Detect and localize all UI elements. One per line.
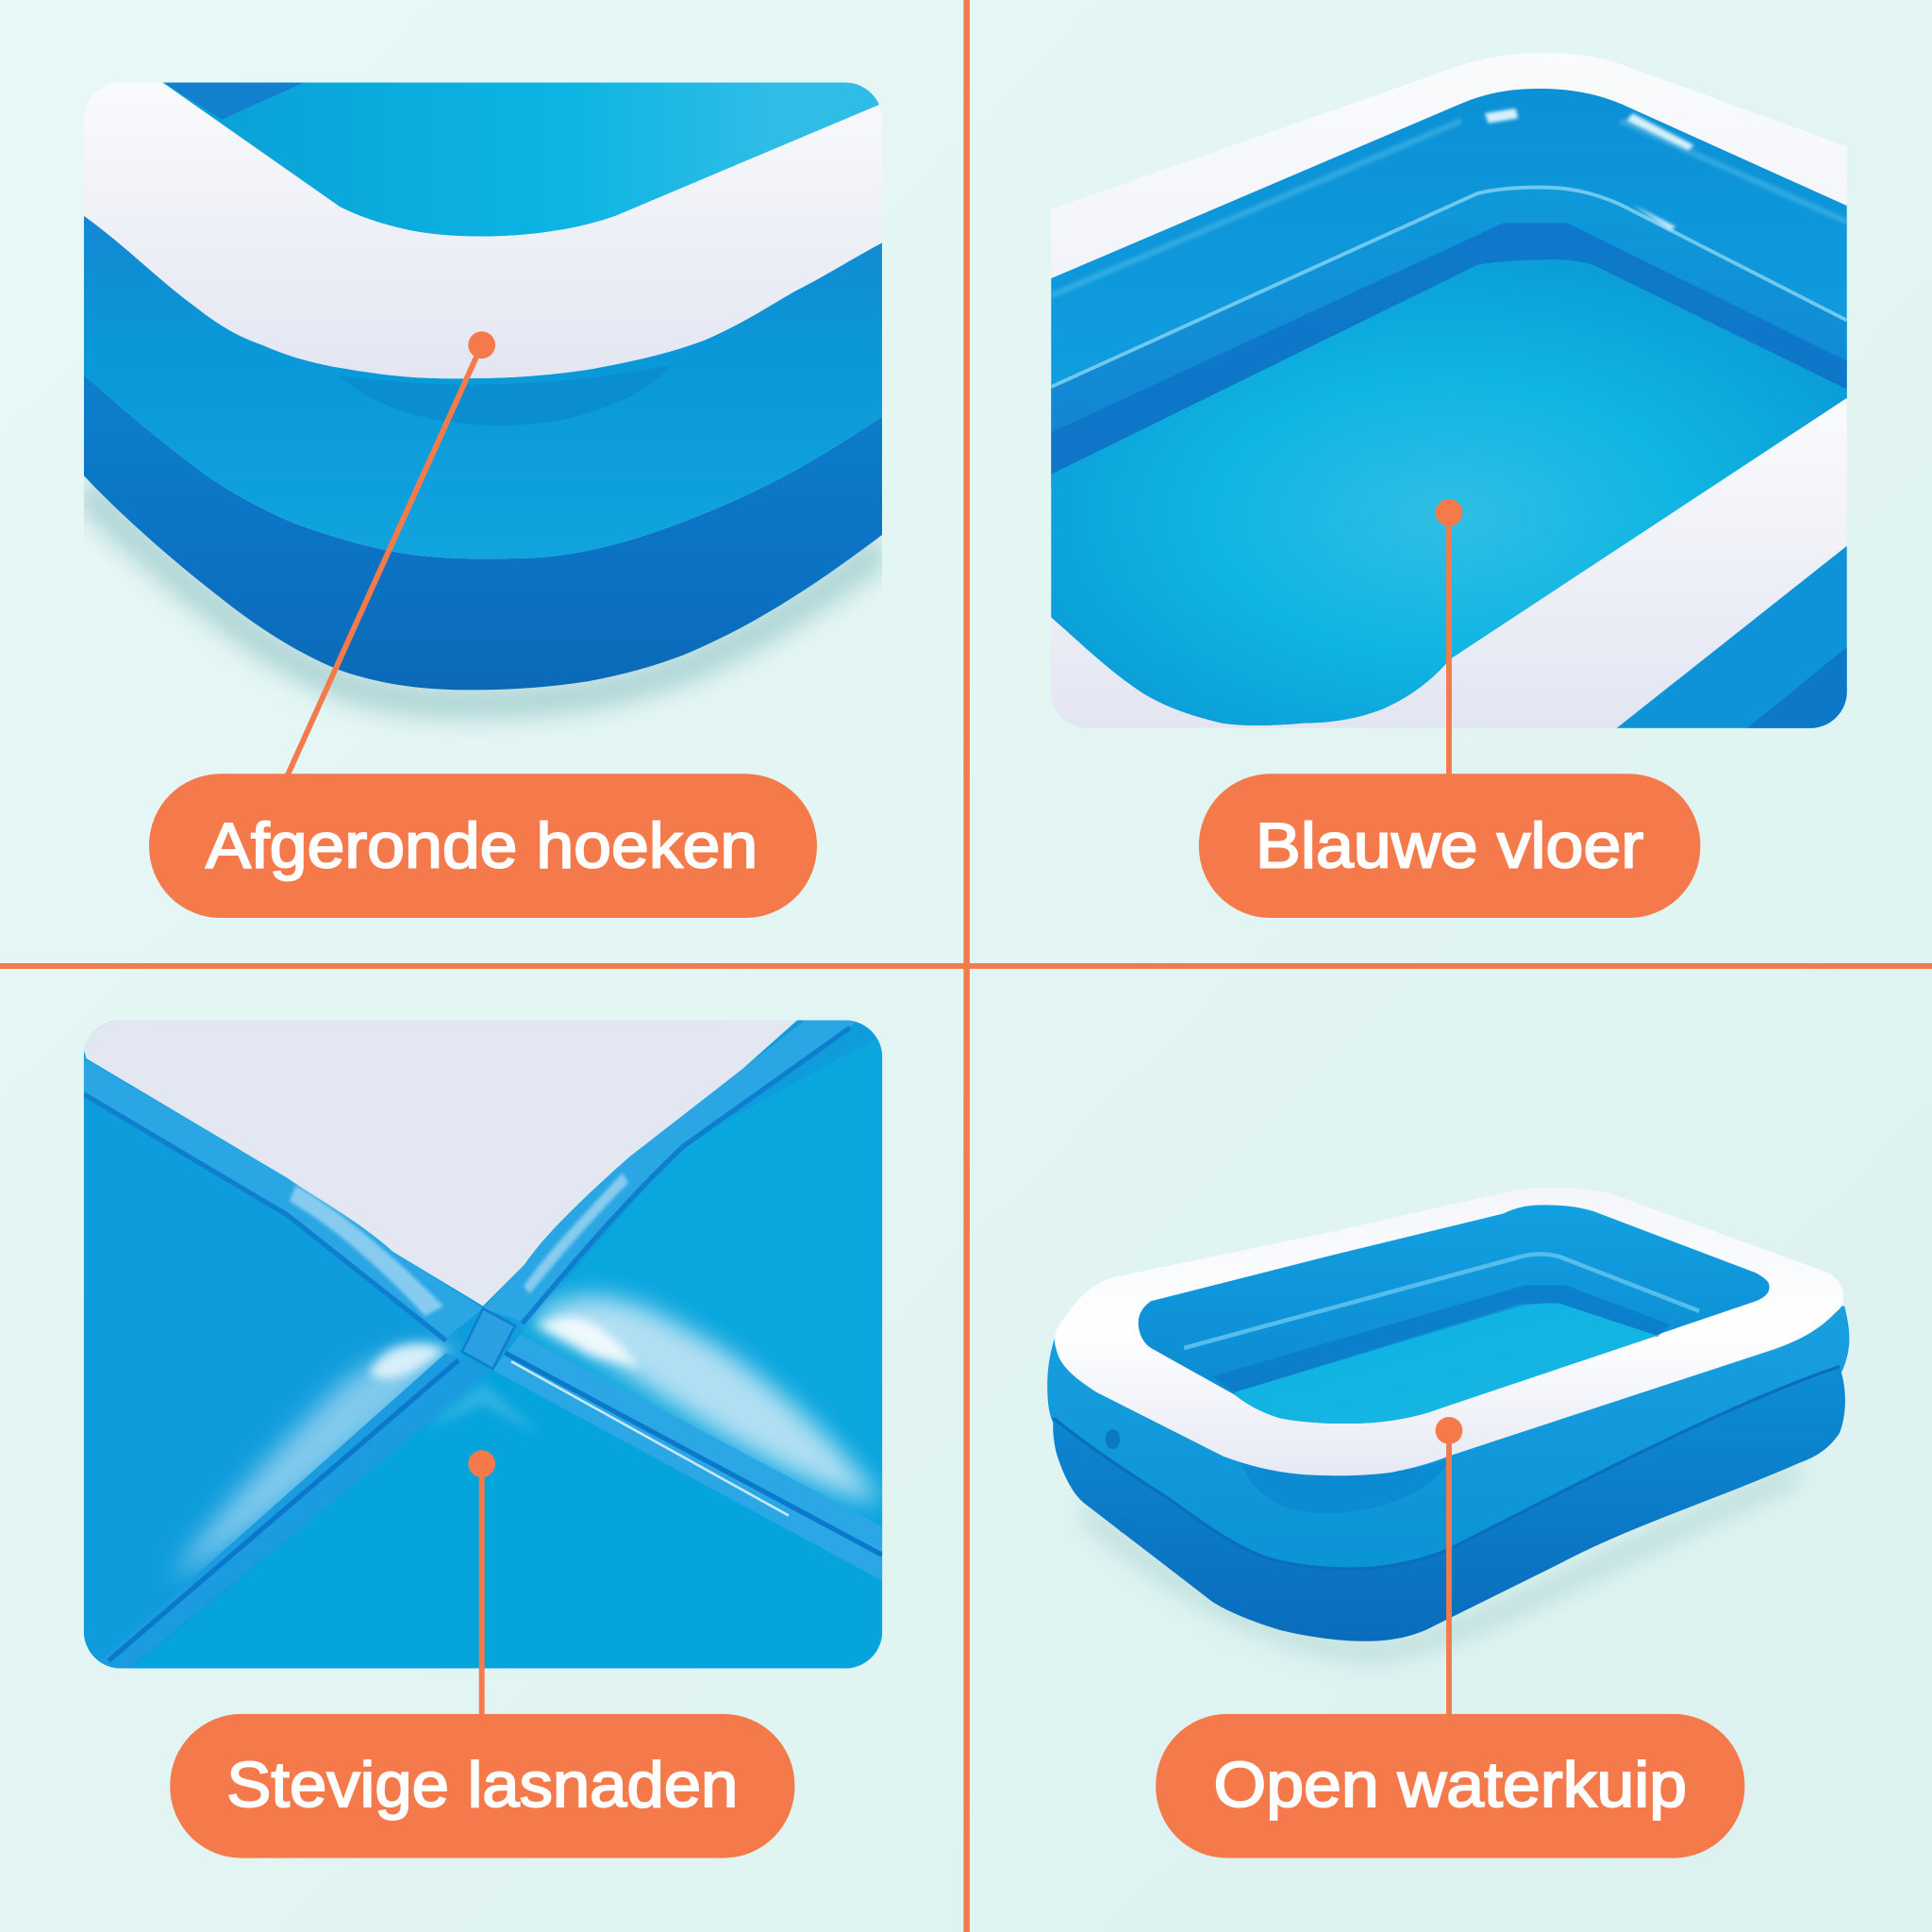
marker dot: [1436, 1417, 1462, 1444]
seam lower left: [92, 1353, 492, 1668]
upper inner seam: [1184, 1254, 1699, 1348]
panel: open waterkuip: [1047, 1188, 1849, 1651]
marker dot: [468, 1450, 495, 1477]
leader line: [1447, 1430, 1451, 1716]
weld centre: [462, 1308, 515, 1369]
callout: blauwe vloer: [1199, 499, 1700, 918]
seam lower right: [492, 1335, 882, 1581]
panel: blauwe vloer: [1051, 53, 1847, 740]
far wall: [164, 83, 304, 120]
white top triangle: [74, 1010, 808, 1306]
leader line: [1447, 512, 1451, 776]
right wall highlight wide: [530, 1296, 882, 1503]
outer wall upper: [1047, 1306, 1849, 1574]
seam highlight: [1051, 188, 1847, 387]
top gloss: [1051, 121, 1847, 295]
leader line: [479, 1464, 484, 1716]
seam upper left: [84, 1058, 483, 1338]
callout: stevige lasnaden: [170, 1450, 794, 1858]
leader line: [287, 345, 482, 776]
left wall highlight wide: [173, 1348, 456, 1577]
valve lower: [1118, 1516, 1130, 1533]
bottom wall glow: [425, 1382, 542, 1436]
corner glints: [1485, 108, 1694, 230]
pill: [1199, 774, 1700, 918]
lower wall shade: [1051, 223, 1847, 475]
white rim top: [1051, 53, 1847, 740]
chamber seam: [1054, 1366, 1840, 1569]
label text: Afgeronde hoeken: [206, 811, 758, 882]
front reflection: [1239, 1457, 1448, 1513]
pool floor: [1051, 259, 1847, 725]
upper wall: [1051, 89, 1847, 432]
white rim: [1055, 1188, 1843, 1475]
label text: Blauwe vloer: [1256, 811, 1643, 882]
wall base: [84, 1020, 882, 1668]
front white rim: [1051, 398, 1847, 728]
upper chamber reflection: [339, 365, 672, 425]
seam upper right: [483, 1018, 862, 1321]
pill: [149, 774, 817, 918]
callout: afgeronde hoeken: [149, 331, 817, 918]
ground shadow: [84, 488, 882, 702]
bottom wall: [124, 1370, 882, 1675]
left wall highlight bright: [370, 1343, 446, 1378]
panel: stevige lasnaden: [74, 1010, 882, 1675]
callout: open waterkuip: [1156, 1417, 1744, 1858]
white rim: [74, 74, 882, 378]
lower inner wall: [1212, 1285, 1671, 1392]
label text: Open waterkuip: [1214, 1750, 1687, 1821]
label text: Stevige lasnaden: [226, 1750, 738, 1821]
marker dot: [1436, 499, 1462, 526]
pool floor: [150, 74, 882, 237]
inner walls: [1139, 1205, 1770, 1424]
lower wall: [1051, 185, 1847, 487]
pill: [170, 1714, 794, 1858]
right wall highlight bright: [536, 1318, 641, 1368]
valve upper: [1106, 1429, 1120, 1449]
pool floor: [1235, 1303, 1657, 1424]
outer wall lower: [1053, 1366, 1845, 1641]
upper chamber: [84, 216, 882, 558]
pill: [1156, 1714, 1744, 1858]
right wall: [520, 1035, 882, 1528]
lower chamber: [84, 375, 882, 690]
marker dot: [468, 331, 495, 358]
outer wall corner: [1617, 546, 1847, 740]
shadow: [1084, 1473, 1799, 1651]
panel: afgeronde hoeken: [74, 74, 882, 702]
